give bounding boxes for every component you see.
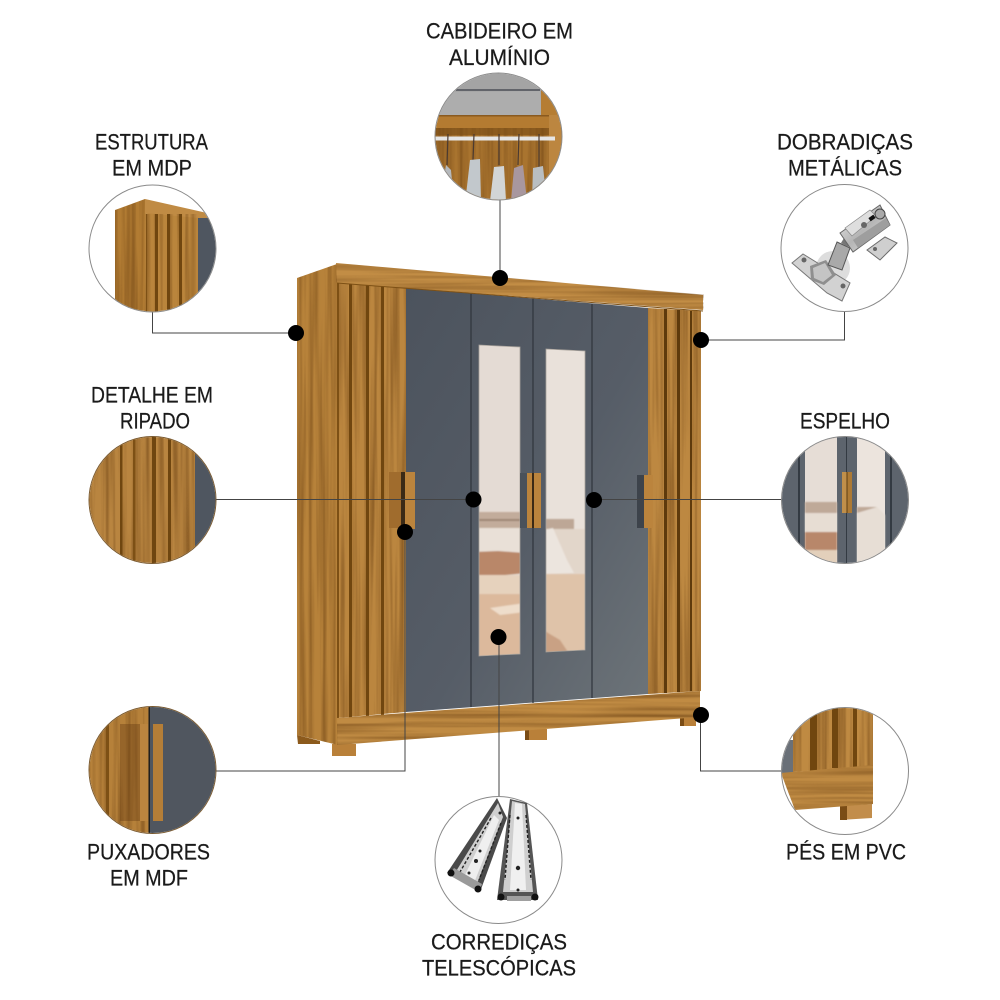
left slatted panel (337, 283, 406, 719)
label: puxadores em MDF: EM MDF (110, 866, 188, 890)
callout: estrutura em MDP (89, 185, 218, 324)
side panel (297, 262, 338, 746)
label: detalhe em ripado: DETALHE EM (91, 382, 213, 408)
label: puxadores em MDF: PUXADORES (87, 840, 210, 864)
left handle (389, 472, 415, 529)
connector lines (152, 199, 844, 797)
label: puxadores em MDF (87, 840, 210, 890)
callout: dobradicas metalicas (781, 184, 908, 312)
callout: corredicas telescopicas (435, 796, 562, 924)
label: dobradicas metalicas: METÁLICAS (788, 156, 902, 180)
label: dobradicas metalicas: DOBRADIÇAS (777, 130, 913, 154)
label: corredicas telescopicas: TELESCÓPICAS (422, 956, 576, 980)
callout: pes em PVC (781, 706, 908, 834)
grey doors (406, 288, 648, 712)
label: detalhe em ripado (91, 382, 213, 434)
callout: detalhe em ripado (88, 436, 217, 564)
left mirror (479, 346, 520, 656)
label: cabideiro em aluminio (426, 18, 573, 70)
label: pes em PVC: PÉS EM PVC (786, 840, 906, 864)
wardrobe (297, 262, 704, 756)
hinge icon (792, 205, 897, 301)
right mirror (546, 350, 585, 652)
mirror outlines (479, 345, 585, 656)
right slatted panel (648, 308, 701, 694)
callout: puxadores em MDF (88, 706, 217, 834)
label: estrutura em MDP: EM MDP (112, 156, 192, 180)
label: corredicas telescopicas: CORREDIÇAS (431, 930, 567, 954)
label: estrutura em MDP (95, 130, 208, 180)
label: corredicas telescopicas (422, 930, 576, 980)
label: cabideiro em aluminio: CABIDEIRO EM (426, 18, 573, 44)
label: espelho: ESPELHO (800, 408, 890, 434)
callout: cabideiro em aluminio (435, 73, 563, 201)
label: estrutura em MDP: ESTRUTURA (95, 130, 208, 154)
right slide (497, 799, 538, 901)
centre handle (520, 473, 541, 528)
marker dots (288, 270, 709, 723)
base band (337, 691, 700, 745)
feet (297, 716, 696, 756)
left slide (447, 798, 507, 892)
label: cabideiro em aluminio: ALUMÍNIO (449, 45, 550, 70)
cornice (336, 263, 704, 311)
label: detalhe em ripado: RIPADO (120, 408, 190, 434)
label: dobradicas metalicas (777, 130, 913, 180)
callout: espelho (781, 436, 909, 564)
right handle (637, 475, 653, 528)
